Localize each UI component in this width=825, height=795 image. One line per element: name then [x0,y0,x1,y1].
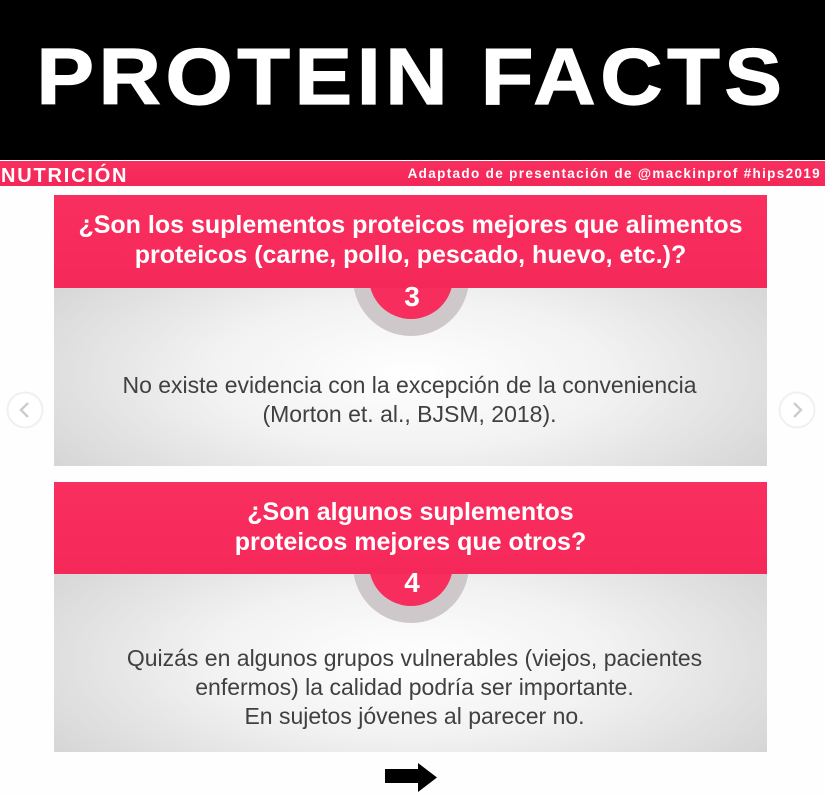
question heading [54,195,767,288]
number ring [353,220,469,336]
number ring [353,507,469,623]
credit text: Adaptado de presentación de @mackinprof #hips2019 [408,166,821,181]
section label: NUTRICIÓN [1,165,128,187]
answer text: No existe evidencia con la excepción de la conveniencia [122,372,697,398]
icon: previous arrow button [6,392,44,428]
question text: ¿Son algunos suplementos [247,498,574,526]
number disc [370,574,452,606]
answer text: (Morton et. al., BJSM, 2018). [262,401,556,427]
title: PROTEIN FACTS [36,32,787,121]
icon: next arrow button [778,392,816,428]
number 3: 3 [404,281,420,312]
question text [78,211,743,269]
number disc [370,288,452,319]
question text: ¿Son los suplementos proteicos mejores que alimentos [78,211,743,239]
answer text: Quizás en algunos grupos vulnerables (viejos, pacientes [127,645,702,671]
icon: black arrow [385,763,437,792]
answer text: enfermos) la calidad podría ser importante. [195,674,634,700]
question heading [54,482,767,574]
answer text: En sujetos jóvenes al parecer no. [244,703,585,729]
question text: proteicos (carne, pollo, pescado, huevo, etc.)? [135,241,686,269]
number 4: 4 [404,567,420,598]
panel: question 3 [54,195,767,466]
answer text [122,372,697,427]
question text [235,498,586,556]
answer text [127,645,702,729]
question text: proteicos mejores que otros? [235,528,586,556]
section bar [0,161,825,186]
panel: question 4 [54,482,767,752]
title banner [0,0,825,160]
